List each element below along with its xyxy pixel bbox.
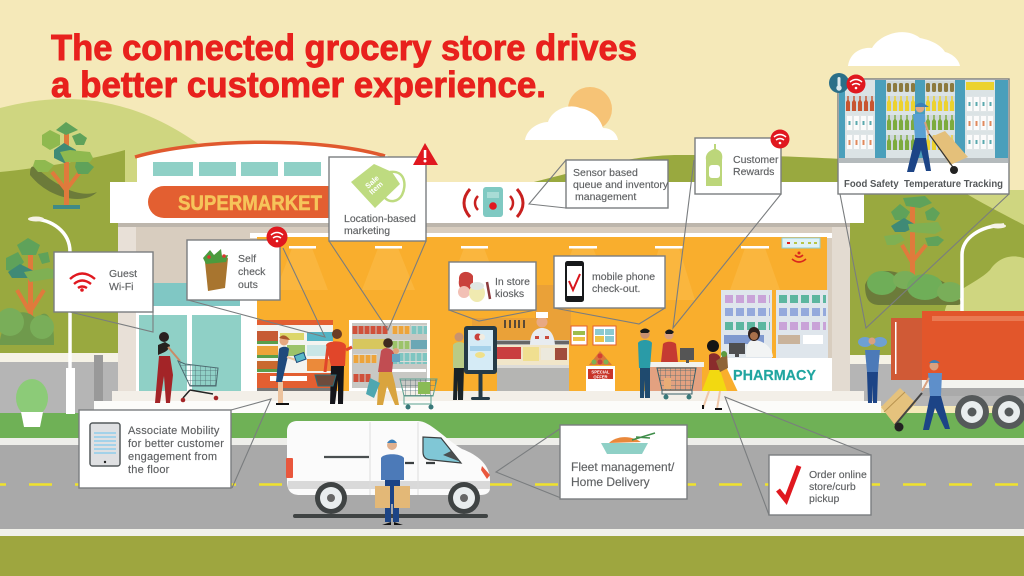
callout: fleet management: Fleet management/ [571,460,675,474]
cloud near sun [525,106,618,140]
callout: guest wi-fi: Wi-Fi [109,281,134,293]
cloud top right [848,32,960,66]
icon: wifi badge self check out [266,226,288,248]
callout: order online [725,397,871,515]
entrance glass doors [139,283,241,391]
callout: mobile phone check-out: mobile phone [592,271,655,283]
employee with tablet [276,335,306,404]
callout: in store kiosks: kiosks [495,288,524,300]
callout: food safety temperature tracking [838,79,1009,328]
icon: alert triangle [413,143,438,165]
callout: sensor queue: queue and inventory [573,179,669,191]
right tree with bushes [865,196,963,305]
callout: self check outs: check [238,266,266,278]
deli counter [497,320,569,392]
callout: order online: pickup [809,493,840,505]
icon: wifi badge food safety [846,74,866,94]
pharmacy counter: PHARMACY [733,368,816,384]
street strip left and gray lot [0,353,120,414]
street lamp right [962,224,1006,330]
interactive kiosk [464,326,497,400]
callout: customer rewards [673,138,781,328]
pavement steps [94,391,881,413]
shelf groceries [349,320,430,391]
worker with dolly [881,360,950,432]
shelf produce [257,320,333,391]
callout: in store kiosks [449,262,536,321]
butcher [530,312,555,345]
title [51,27,637,105]
callout: associate mobility [79,399,271,488]
checkout counter [650,348,704,392]
tree left top [30,122,97,209]
callout: guest wi-fi: Guest [109,268,137,280]
supermarket building [110,142,864,393]
callout: customer rewards: Rewards [733,166,774,178]
callout: guest wi-fi [54,252,153,332]
callout: mobile phone check-out: check-out. [592,283,640,295]
delivery truck [891,311,1024,429]
special offer stand [586,351,615,392]
callout: location-based marketing: Location-based [344,213,416,225]
callout: order online: store/curb [809,481,856,493]
callout: sensor queue [529,160,669,208]
callout: order online: Order online [809,469,867,481]
sensor device on sign [464,187,523,217]
sun [568,87,612,131]
street lamp left [28,216,75,414]
callout: fleet management [496,425,687,499]
callout: in store kiosks: In store [495,276,530,288]
sign: supermarket: SUPERMARKET [178,192,322,215]
title: a better customer experience. [51,64,546,105]
callout: location-based marketing: marketing [344,225,390,237]
icon: wifi badge rewards [770,130,790,148]
background hills [0,99,1024,360]
shopper with cart [155,332,218,403]
callout: associate mobility: engagement from [128,451,217,463]
callout: food safety temperature tracking: Food Safety Temperature Tracking [844,178,1003,190]
potted plant [16,379,48,427]
street strip right [850,355,1024,406]
sign: supermarket [148,186,330,218]
callout: associate mobility: Associate Mobility [128,425,220,437]
callout: fleet management: Home Delivery [571,475,650,489]
wall menu signs [571,326,616,345]
mother with baby [366,338,400,405]
callout: customer rewards: Customer [733,154,779,166]
checkout cart [657,368,696,400]
pharmacy shelves [721,290,828,358]
callout: location-based marketing [329,157,426,330]
woman in yellow dress [702,340,728,409]
worker with water jugs [858,337,887,403]
cart with groceries [400,379,437,410]
special offer stand: SPECIAL [591,370,610,374]
man at checkout [638,328,652,398]
callout: location-based marketing: Sale [363,173,381,190]
callout: sensor queue: management [575,191,636,203]
callout: self check outs: Self [238,253,256,265]
icon: thermometer badge [829,73,849,93]
callout: associate mobility: for better customer [128,438,224,450]
callout: mobile phone check-out [554,256,665,324]
pharmacy counter [722,358,832,392]
callout: location-based marketing: Item [367,179,385,196]
pharmacist [729,327,773,357]
ground and road [0,413,1024,576]
special offer stand: OFFER [593,374,608,379]
router on wall [782,238,820,262]
title: The connected grocery store drives [51,27,637,68]
ceiling lights [276,246,780,300]
callout: self check outs: outs [238,279,258,291]
callout: associate mobility: the floor [128,464,170,476]
cashier [661,330,678,362]
store interior [257,237,827,391]
man with basket [315,329,352,404]
driver with grocery bags [375,440,410,525]
callout: sensor queue: Sensor based [573,167,638,179]
delivery van [286,421,490,518]
callout: self check outs [187,240,325,337]
tree left bottom with bushes [0,238,60,345]
man at kiosk [453,332,474,400]
